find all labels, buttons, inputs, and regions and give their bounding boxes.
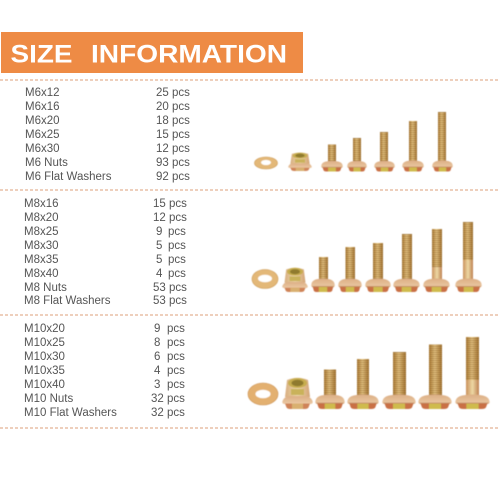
icon: M8x16 bolt — [311, 257, 335, 292]
M10 size list: pcs — [167, 379, 185, 391]
M8 size list: 4 — [156, 268, 163, 280]
M10 size list: pcs — [167, 323, 185, 335]
M8 size list: M8x40 — [24, 268, 59, 280]
M10 size list: M10x25 — [24, 337, 65, 349]
M6 size list: 18 pcs — [156, 115, 190, 127]
M8 size list: 9 — [156, 226, 162, 238]
M8 size list: M8 Nuts — [24, 282, 67, 294]
M6 size list: M6x20 — [25, 115, 60, 127]
M6 size list: 12 pcs — [156, 143, 190, 155]
M8 size list: 15 pcs — [153, 198, 187, 210]
M6 size list: M6x30 — [25, 143, 60, 155]
M6 size list: M6 Flat Washers — [25, 171, 112, 183]
icon: M10x30 bolt — [382, 352, 416, 409]
icon: M8 nut — [282, 268, 308, 292]
title banner: INFORMATION — [91, 40, 287, 68]
M10 size list: 32 pcs — [151, 393, 185, 405]
M6 size list: M6 Nuts — [25, 157, 68, 169]
M8 size list: 53 pcs — [153, 282, 187, 294]
M6 size list: M6x16 — [25, 101, 60, 113]
M8 size list: pcs — [168, 240, 186, 252]
icon: M8x35 bolt — [423, 229, 450, 292]
title banner — [1, 32, 303, 73]
M10 size list: M10x30 — [24, 351, 65, 363]
icon: M8x40 bolt — [455, 222, 482, 292]
icon: M6x30 bolt — [432, 112, 453, 172]
M8 size list: M8x20 — [24, 212, 59, 224]
icon: M6x16 bolt — [347, 138, 367, 172]
M6 size list: 93 pcs — [156, 157, 190, 169]
icon: M8x25 bolt — [365, 243, 391, 292]
icon: M6x20 bolt — [374, 132, 395, 172]
icon: M10x25 bolt — [347, 359, 379, 409]
M6 size list: 92 pcs — [156, 171, 190, 183]
M10 size list: M10 Nuts — [24, 393, 73, 405]
title banner: SIZE — [10, 40, 72, 68]
M8 size list: M8 Flat Washers — [24, 295, 111, 307]
M8 size list: pcs — [168, 254, 186, 266]
M10 hardware row — [248, 337, 490, 409]
M8 size list: M8x16 — [24, 198, 59, 210]
M8 size list: 5 — [156, 254, 162, 266]
M10 size list: M10x35 — [24, 365, 65, 377]
M10 size list: 32 pcs — [151, 407, 185, 419]
M10 size list: M10x20 — [24, 323, 65, 335]
M8 size list: pcs — [168, 226, 186, 238]
M10 size list: 9 — [154, 323, 160, 335]
icon: M10x40 bolt — [455, 337, 490, 409]
M10 size list — [24, 323, 185, 419]
icon: M10 flat washer — [248, 383, 278, 405]
M8 size list: M8x25 — [24, 226, 59, 238]
M6 size list: 15 pcs — [156, 129, 190, 141]
M10 size list: 4 — [154, 365, 161, 377]
M10 size list: 3 — [154, 379, 160, 391]
icon: M8x20 bolt — [338, 247, 362, 292]
M6 size list: 20 pcs — [156, 101, 190, 113]
M8 size list: pcs — [168, 268, 186, 280]
M8 size list: 5 — [156, 240, 162, 252]
M10 size list: 6 — [154, 351, 160, 363]
M10 size list: pcs — [167, 351, 185, 363]
M6 size list: M6x25 — [25, 129, 60, 141]
M10 size list: 8 — [154, 337, 160, 349]
M6 size list: 25 pcs — [156, 87, 190, 99]
M6 hardware row — [254, 112, 453, 172]
icon: M6 flat washer — [254, 157, 278, 169]
icon: M10 nut — [282, 378, 313, 409]
M10 size list: M10x40 — [24, 379, 65, 391]
M10 size list: pcs — [167, 337, 185, 349]
M8 size list: M8x30 — [24, 240, 59, 252]
M8 size list: 12 pcs — [153, 212, 187, 224]
M6 size list — [25, 87, 190, 183]
M8 hardware row — [252, 222, 482, 292]
icon: M8 flat washer — [252, 270, 278, 288]
icon: M10x20 bolt — [315, 370, 345, 409]
M8 size list: M8x35 — [24, 254, 59, 266]
icon: M8x30 bolt — [393, 234, 420, 292]
M6 size list: M6x12 — [25, 87, 60, 99]
icon: M6 nut — [288, 152, 312, 171]
M8 size list — [24, 198, 187, 307]
M10 size list: M10 Flat Washers — [24, 407, 117, 419]
icon: M6x12 bolt — [321, 144, 343, 172]
M10 size list: pcs — [167, 365, 185, 377]
icon: M6x25 bolt — [402, 121, 424, 172]
M8 size list: 53 pcs — [153, 295, 187, 307]
icon: M10x35 bolt — [418, 344, 452, 409]
